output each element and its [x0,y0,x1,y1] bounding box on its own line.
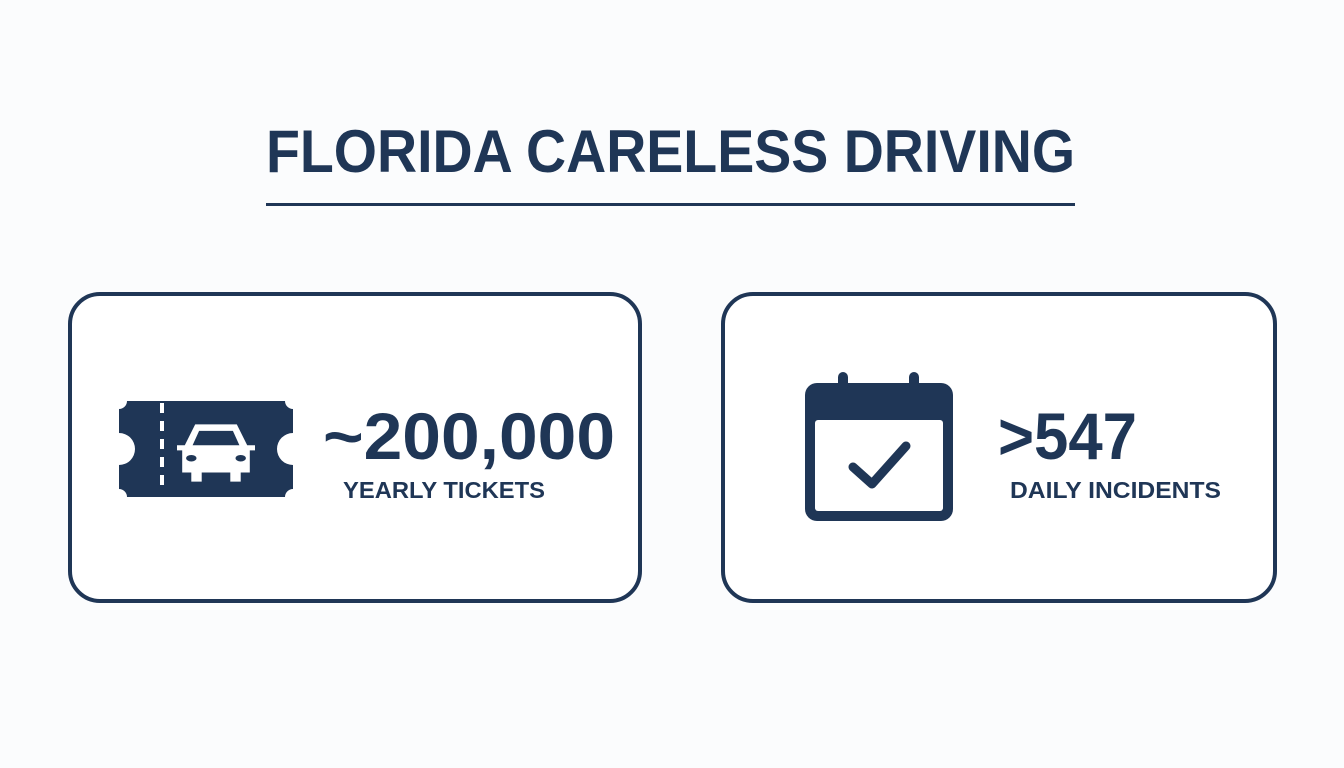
label: daily incidents: DAILY INCIDENTS [1010,477,1221,503]
stat: ~200,000: ~200,000 [323,399,615,473]
panel: yearly tickets [70,294,640,601]
stat: >547: >547 [998,399,1137,473]
icon: calendar with check [805,372,953,521]
label: yearly tickets: YEARLY TICKETS [343,477,545,503]
title: FLORIDA CARELESS DRIVING [266,118,1075,185]
panel: daily incidents [723,294,1275,601]
icon: ticket with car [119,401,293,497]
